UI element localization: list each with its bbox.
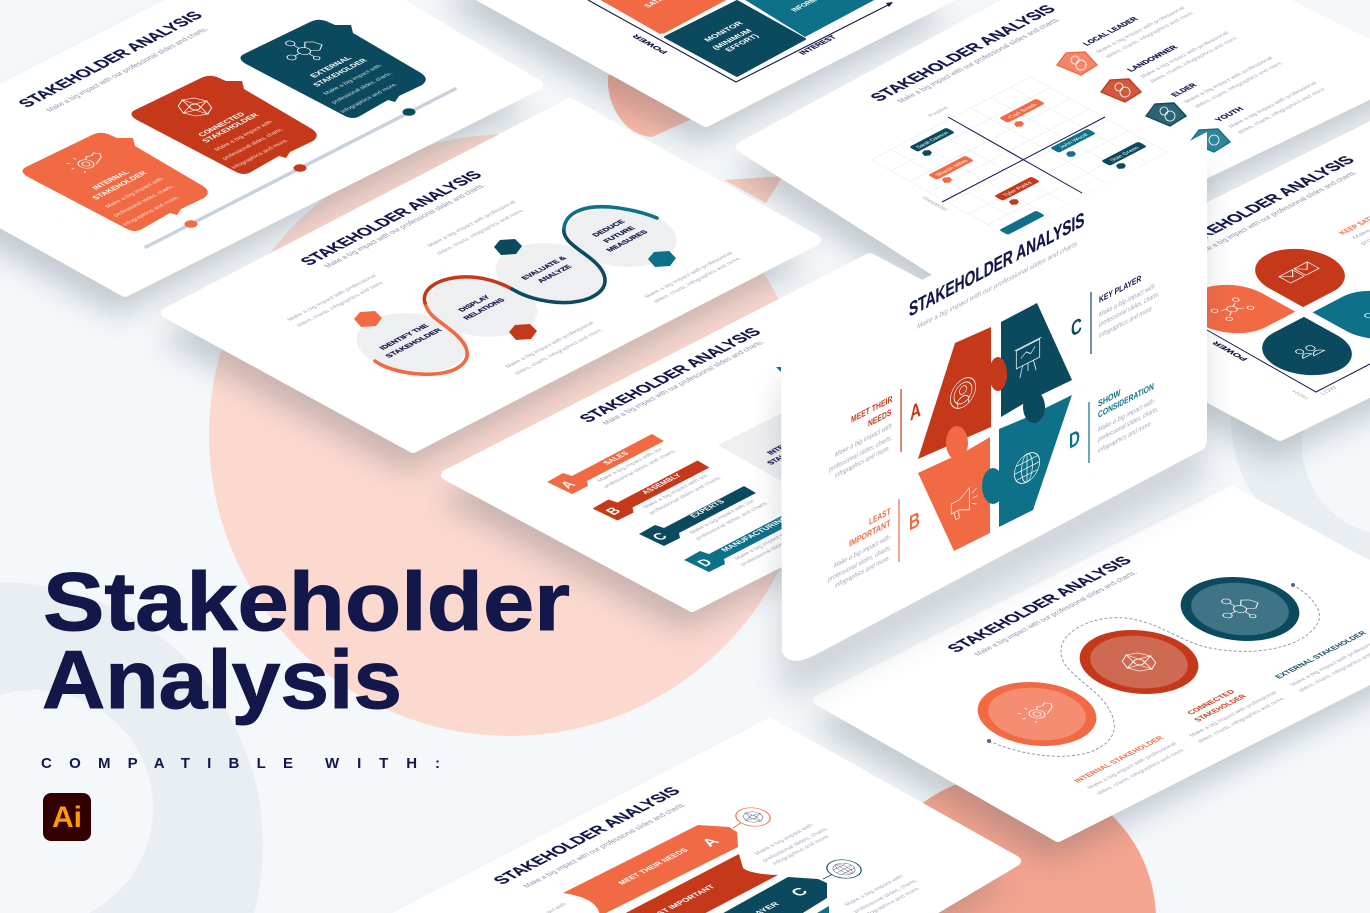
main title <box>42 555 570 726</box>
heading: STAKEHOLDER ANALYSIS <box>1166 154 1359 255</box>
step labels: STAKEHOLDER <box>384 328 444 359</box>
key: elder: slides, charts, infographics and more. <box>1193 60 1286 109</box>
puzzle piece: D teal <box>982 395 1072 527</box>
tab A: SALES <box>601 450 631 466</box>
block C: key player: infographics and more. <box>1099 305 1153 340</box>
card: connected <box>131 76 317 174</box>
tab A: A <box>557 479 579 491</box>
step labels: EVALUATE & <box>520 256 569 281</box>
card: connected: STAKEHOLDER <box>200 111 262 144</box>
heading: STAKEHOLDER ANALYSIS <box>867 3 1060 104</box>
tab B: ASSEMBLY <box>639 472 684 496</box>
tags: John Wood <box>1058 133 1090 150</box>
grey block <box>718 404 800 492</box>
block B: least important: IMPORTANT <box>849 517 891 549</box>
letters: C <box>1071 314 1082 342</box>
tags: Stan Green <box>1109 146 1141 163</box>
card: connected: infographics and more. <box>230 138 291 170</box>
dashed connector <box>987 583 1319 756</box>
card: external: STAKEHOLDER <box>311 57 370 88</box>
compatible with: COMPATIBLE <box>41 755 293 772</box>
grey block label: STAKEHOLDER <box>765 437 820 466</box>
slider track <box>146 89 455 247</box>
label: internal: Make a big impact with professional <box>1086 742 1179 790</box>
tab D: D <box>694 557 716 569</box>
banner C <box>718 877 827 913</box>
block B: least important: LEAST <box>869 506 891 527</box>
puzzle piece: B orange <box>918 426 990 551</box>
step labels: DISPLAY <box>457 294 493 313</box>
subheading: Make a big impact with our professional slides and charts. <box>1192 169 1360 257</box>
card: internal: professional slides, charts, <box>112 184 177 218</box>
card: internal <box>22 133 208 231</box>
petal: orange <box>1169 275 1295 343</box>
block B: least important: Make a big impact with <box>834 534 890 570</box>
card: connected: CONNECTED <box>196 110 248 138</box>
tab A: Make a big impact with our <box>596 447 665 483</box>
card: internal: Make a big impact with <box>104 177 166 209</box>
slider dots <box>184 108 416 228</box>
block C: key player: KEY PLAYER <box>1099 273 1142 305</box>
heading: STAKEHOLDER ANALYSIS <box>576 326 766 425</box>
block C: key player: professional slides, charts, <box>1098 291 1159 329</box>
step labels: MEASURES <box>605 229 650 253</box>
key: local leader: Make a big impact with professional <box>1095 6 1187 54</box>
subheading: Make a big impact with our professional slides and charts. <box>44 26 211 113</box>
grey blobs <box>334 195 699 385</box>
matrix quadrant: keep informed <box>742 0 878 37</box>
key: landowner: LANDOWNER <box>1125 44 1180 73</box>
label: external: EXTERNAL STAKEHOLDER <box>1273 629 1369 680</box>
slide: folded banners <box>362 723 1016 913</box>
icon: presentation board <box>1014 337 1042 381</box>
matrix axes <box>588 0 893 82</box>
tags: Tyler Parks <box>1002 181 1034 198</box>
background: salmon patch top <box>608 40 700 137</box>
step labels <box>378 219 650 359</box>
key: local leader <box>1057 6 1197 75</box>
block C: key player: Make a big impact with <box>1099 283 1155 319</box>
subheading: Make a big impact with our professional slides and charts. <box>972 569 1140 657</box>
puzzle piece: C dark <box>1001 303 1072 423</box>
key: youth: slides, charts, infographics and more. <box>1236 86 1329 135</box>
body text: slides, charts, infographics and more. <box>513 327 606 376</box>
tab B: Make a big impact with our <box>642 474 710 510</box>
puzzle piece: A red <box>918 327 991 459</box>
tab C: Make a big impact with our <box>688 499 757 535</box>
background: peach patch right <box>724 176 783 203</box>
axis labels: POWER <box>1212 340 1250 361</box>
tab C: EXPERTS <box>688 498 727 519</box>
key: youth: Make a big impact with professional <box>1227 81 1319 129</box>
teal marker <box>776 367 786 373</box>
block A: meet their needs: MEET THEIR <box>851 393 893 425</box>
slide: ABCD list <box>438 258 1120 631</box>
tab A <box>547 434 679 494</box>
block C: key player <box>1098 273 1159 340</box>
axes <box>942 117 1105 202</box>
circle: external <box>1156 564 1324 654</box>
axis labels: HIGH <box>1291 389 1311 400</box>
slide: cards on slider <box>0 0 538 316</box>
block D: show consideration: Make a big impact with <box>1098 398 1154 434</box>
label: internal: slides, charts, infographics and more. <box>1095 747 1188 796</box>
block A: meet their needs <box>828 393 893 480</box>
background: right ring <box>1231 281 1370 559</box>
key: landowner: slides, charts, infographics and more. <box>1148 35 1241 84</box>
step labels: RELATIONS <box>462 297 507 321</box>
body text: Make a big impact with professional <box>504 321 596 369</box>
tab B: professional slides and charts. <box>648 475 725 516</box>
body text: Make a big impact with professional <box>286 274 379 322</box>
slide: stakeholder map <box>733 0 1370 314</box>
tab D: Make a big impact with our <box>733 525 802 561</box>
label: external <box>1273 629 1370 693</box>
subheading: Make a big impact with our professional slides and charts <box>917 240 1078 331</box>
banner B <box>620 854 778 913</box>
matrix labels: EFFORT) <box>723 32 761 53</box>
subheading: Make a big impact with our professional slides and charts. <box>322 182 488 269</box>
card: external: professional slides, charts, <box>330 71 395 105</box>
block A: meet their needs: infographics and more. <box>835 444 890 480</box>
step labels: DEDUCE <box>591 219 628 238</box>
subheading: Make a big impact with our professional slides and charts. <box>895 16 1063 104</box>
card: external: infographics and more. <box>339 82 400 114</box>
banner A: MEET THEIR NEEDS <box>616 847 690 886</box>
body text: Make a big impact with professional <box>426 200 518 248</box>
label: connected: CONNECTED <box>1185 688 1238 716</box>
tab C <box>639 486 771 546</box>
heading: STAKEHOLDER ANALYSIS <box>909 208 1085 322</box>
body text: Make a big impact with professional <box>643 251 735 299</box>
subheading: Make a big impact with our professional slides and charts. <box>521 801 689 889</box>
block D: show consideration: CONSIDERATION <box>1098 381 1154 420</box>
label: connected: slides, charts, infographics and more. <box>1196 696 1288 744</box>
circle: internal <box>953 669 1121 759</box>
body text: infographics and more. <box>771 834 833 866</box>
slide: power interest matrix <box>442 0 955 146</box>
tags: Cari Smith <box>1007 103 1039 120</box>
label: connected <box>1185 688 1288 744</box>
key: landowner <box>1101 31 1241 102</box>
tab C: professional slides and charts. <box>694 501 771 541</box>
hexagon markers <box>354 239 676 340</box>
label: connected: STAKEHOLDER <box>1192 693 1249 723</box>
icon: Ai logo: Ai <box>52 801 82 834</box>
block D: show consideration <box>1097 381 1158 455</box>
card: internal: INTERNAL <box>90 169 132 191</box>
axis labels: Unexpected <box>920 196 949 212</box>
card: external <box>240 20 426 118</box>
axis labels: Positive <box>927 106 951 118</box>
icon bubble C <box>820 856 868 882</box>
key: elder: Make a big impact with professional <box>1183 56 1275 104</box>
key: youth: YOUTH <box>1213 105 1246 123</box>
matrix labels: INTEREST <box>797 34 839 56</box>
matrix labels: (MINIMUM <box>710 27 754 51</box>
background: large peach circle <box>209 134 811 736</box>
step labels: IDENTIFY THE <box>378 323 431 351</box>
body text: slides, charts, infographics and more. <box>652 256 744 304</box>
matrix labels: POWER <box>632 33 670 54</box>
letters <box>909 314 1082 536</box>
slide: petal matrix <box>1092 102 1370 460</box>
heading: STAKEHOLDER ANALYSIS <box>490 785 685 887</box>
tab B <box>592 460 725 520</box>
puzzle knob: A red <box>989 357 1007 391</box>
axes <box>1207 330 1370 392</box>
grid <box>871 77 1187 246</box>
body text <box>286 200 744 376</box>
key: landowner: Make a big impact with professional <box>1139 31 1231 79</box>
card: connected: professional slides, charts, <box>221 127 286 161</box>
matrix labels <box>632 0 839 56</box>
tab B: B <box>602 505 624 517</box>
card: connected: Make a big impact with <box>213 120 275 152</box>
block A: meet their needs: professional slides, charts, <box>828 434 892 474</box>
block A: meet their needs: NEEDS <box>868 407 891 429</box>
axis labels <box>1212 340 1340 400</box>
block B: least important: professional slides, charts, <box>827 544 891 584</box>
slide: three circles <box>810 491 1370 861</box>
matrix quadrant: monitor <box>665 1 805 76</box>
block D: show consideration: SHOW <box>1098 387 1121 409</box>
block B: least important <box>827 506 891 590</box>
main title: Analysis <box>42 633 402 726</box>
label: external: Make a big impact with professional <box>1289 639 1370 687</box>
banner A: A <box>699 836 724 849</box>
tab C: C <box>649 531 671 543</box>
card: external: EXTERNAL <box>308 54 354 79</box>
label: internal: INTERNAL STAKEHOLDER <box>1072 734 1166 784</box>
key: elder: ELDER <box>1169 82 1200 98</box>
tab D: MANUFACTURING <box>719 515 791 553</box>
banner C: C <box>788 886 813 899</box>
matrix quadrant: satisfy <box>597 0 730 34</box>
tags: Sarah Dawson <box>915 131 951 150</box>
step labels: FUTURE <box>602 225 638 244</box>
main title: Stakeholder <box>43 555 570 648</box>
card: internal: infographics and more. <box>121 195 182 227</box>
banner D <box>812 906 829 913</box>
axis labels <box>920 106 951 212</box>
tab D <box>684 512 816 572</box>
icon: globe <box>1014 448 1040 488</box>
compatible with: WITH: <box>325 755 440 772</box>
body text: Make a big impact with <box>753 823 816 856</box>
body text <box>508 823 923 913</box>
body text: slides, charts, infographics and more. <box>435 208 527 256</box>
petal: dark <box>1244 317 1370 385</box>
icon: megaphone <box>951 484 977 522</box>
matrix labels: MONITOR <box>702 20 746 43</box>
petal: red <box>1237 239 1363 307</box>
key: youth <box>1190 81 1329 152</box>
letters: A <box>910 398 921 426</box>
heading: STAKEHOLDER ANALYSIS <box>944 554 1136 655</box>
body text: professional slides, charts, <box>761 826 831 863</box>
key: local leader: LOCAL LEADER <box>1081 15 1141 47</box>
tags: Sharon Miles <box>934 159 970 178</box>
icon bubble A <box>729 804 777 830</box>
icon: target <box>950 373 976 413</box>
grey block label: INTERNAL <box>765 435 805 456</box>
letters: D <box>1069 426 1080 454</box>
body text: Make a big impact with <box>843 874 906 907</box>
slide: puzzle <box>779 132 1207 695</box>
step labels: ANALYZE <box>536 264 574 284</box>
compatible with <box>41 755 440 772</box>
letters: B <box>909 508 920 536</box>
tags <box>909 99 1147 235</box>
petal: teal <box>1313 281 1370 349</box>
dividers <box>899 292 1091 562</box>
block A: meet their needs: Make a big impact with <box>835 422 892 459</box>
label: connected: Make a big impact with professional <box>1188 691 1279 738</box>
slide: wave process <box>158 103 816 472</box>
key: elder <box>1146 56 1286 126</box>
key: local leader: slides, charts, infographics and more. <box>1104 10 1197 59</box>
label: internal <box>1072 734 1188 796</box>
body text: slides, charts, infographics and more. <box>295 280 387 328</box>
subheading: Make a big impact with our professional slides and charts. <box>600 339 767 426</box>
card: external: Make a big impact with <box>322 64 384 96</box>
tab D: professional slides and charts. <box>739 527 816 567</box>
banner A <box>563 825 738 913</box>
block B: least important: infographics and more. <box>835 554 890 590</box>
heading: STAKEHOLDER ANALYSIS <box>297 169 487 268</box>
tab A: professional slides and charts. <box>602 449 679 489</box>
card: internal: STAKEHOLDER <box>90 169 150 201</box>
heading: STAKEHOLDER ANALYSIS <box>15 9 207 110</box>
wave line <box>375 207 657 374</box>
block D: show consideration: infographics and more. <box>1098 420 1152 455</box>
block D: show consideration: professional slides, charts, <box>1097 406 1158 444</box>
background: left ring <box>0 582 263 913</box>
axis labels: LOW <box>1319 385 1340 396</box>
background: salmon circle bottom right <box>864 774 1156 913</box>
circle: connected <box>1055 617 1223 707</box>
icon: Ai logo <box>43 793 91 841</box>
